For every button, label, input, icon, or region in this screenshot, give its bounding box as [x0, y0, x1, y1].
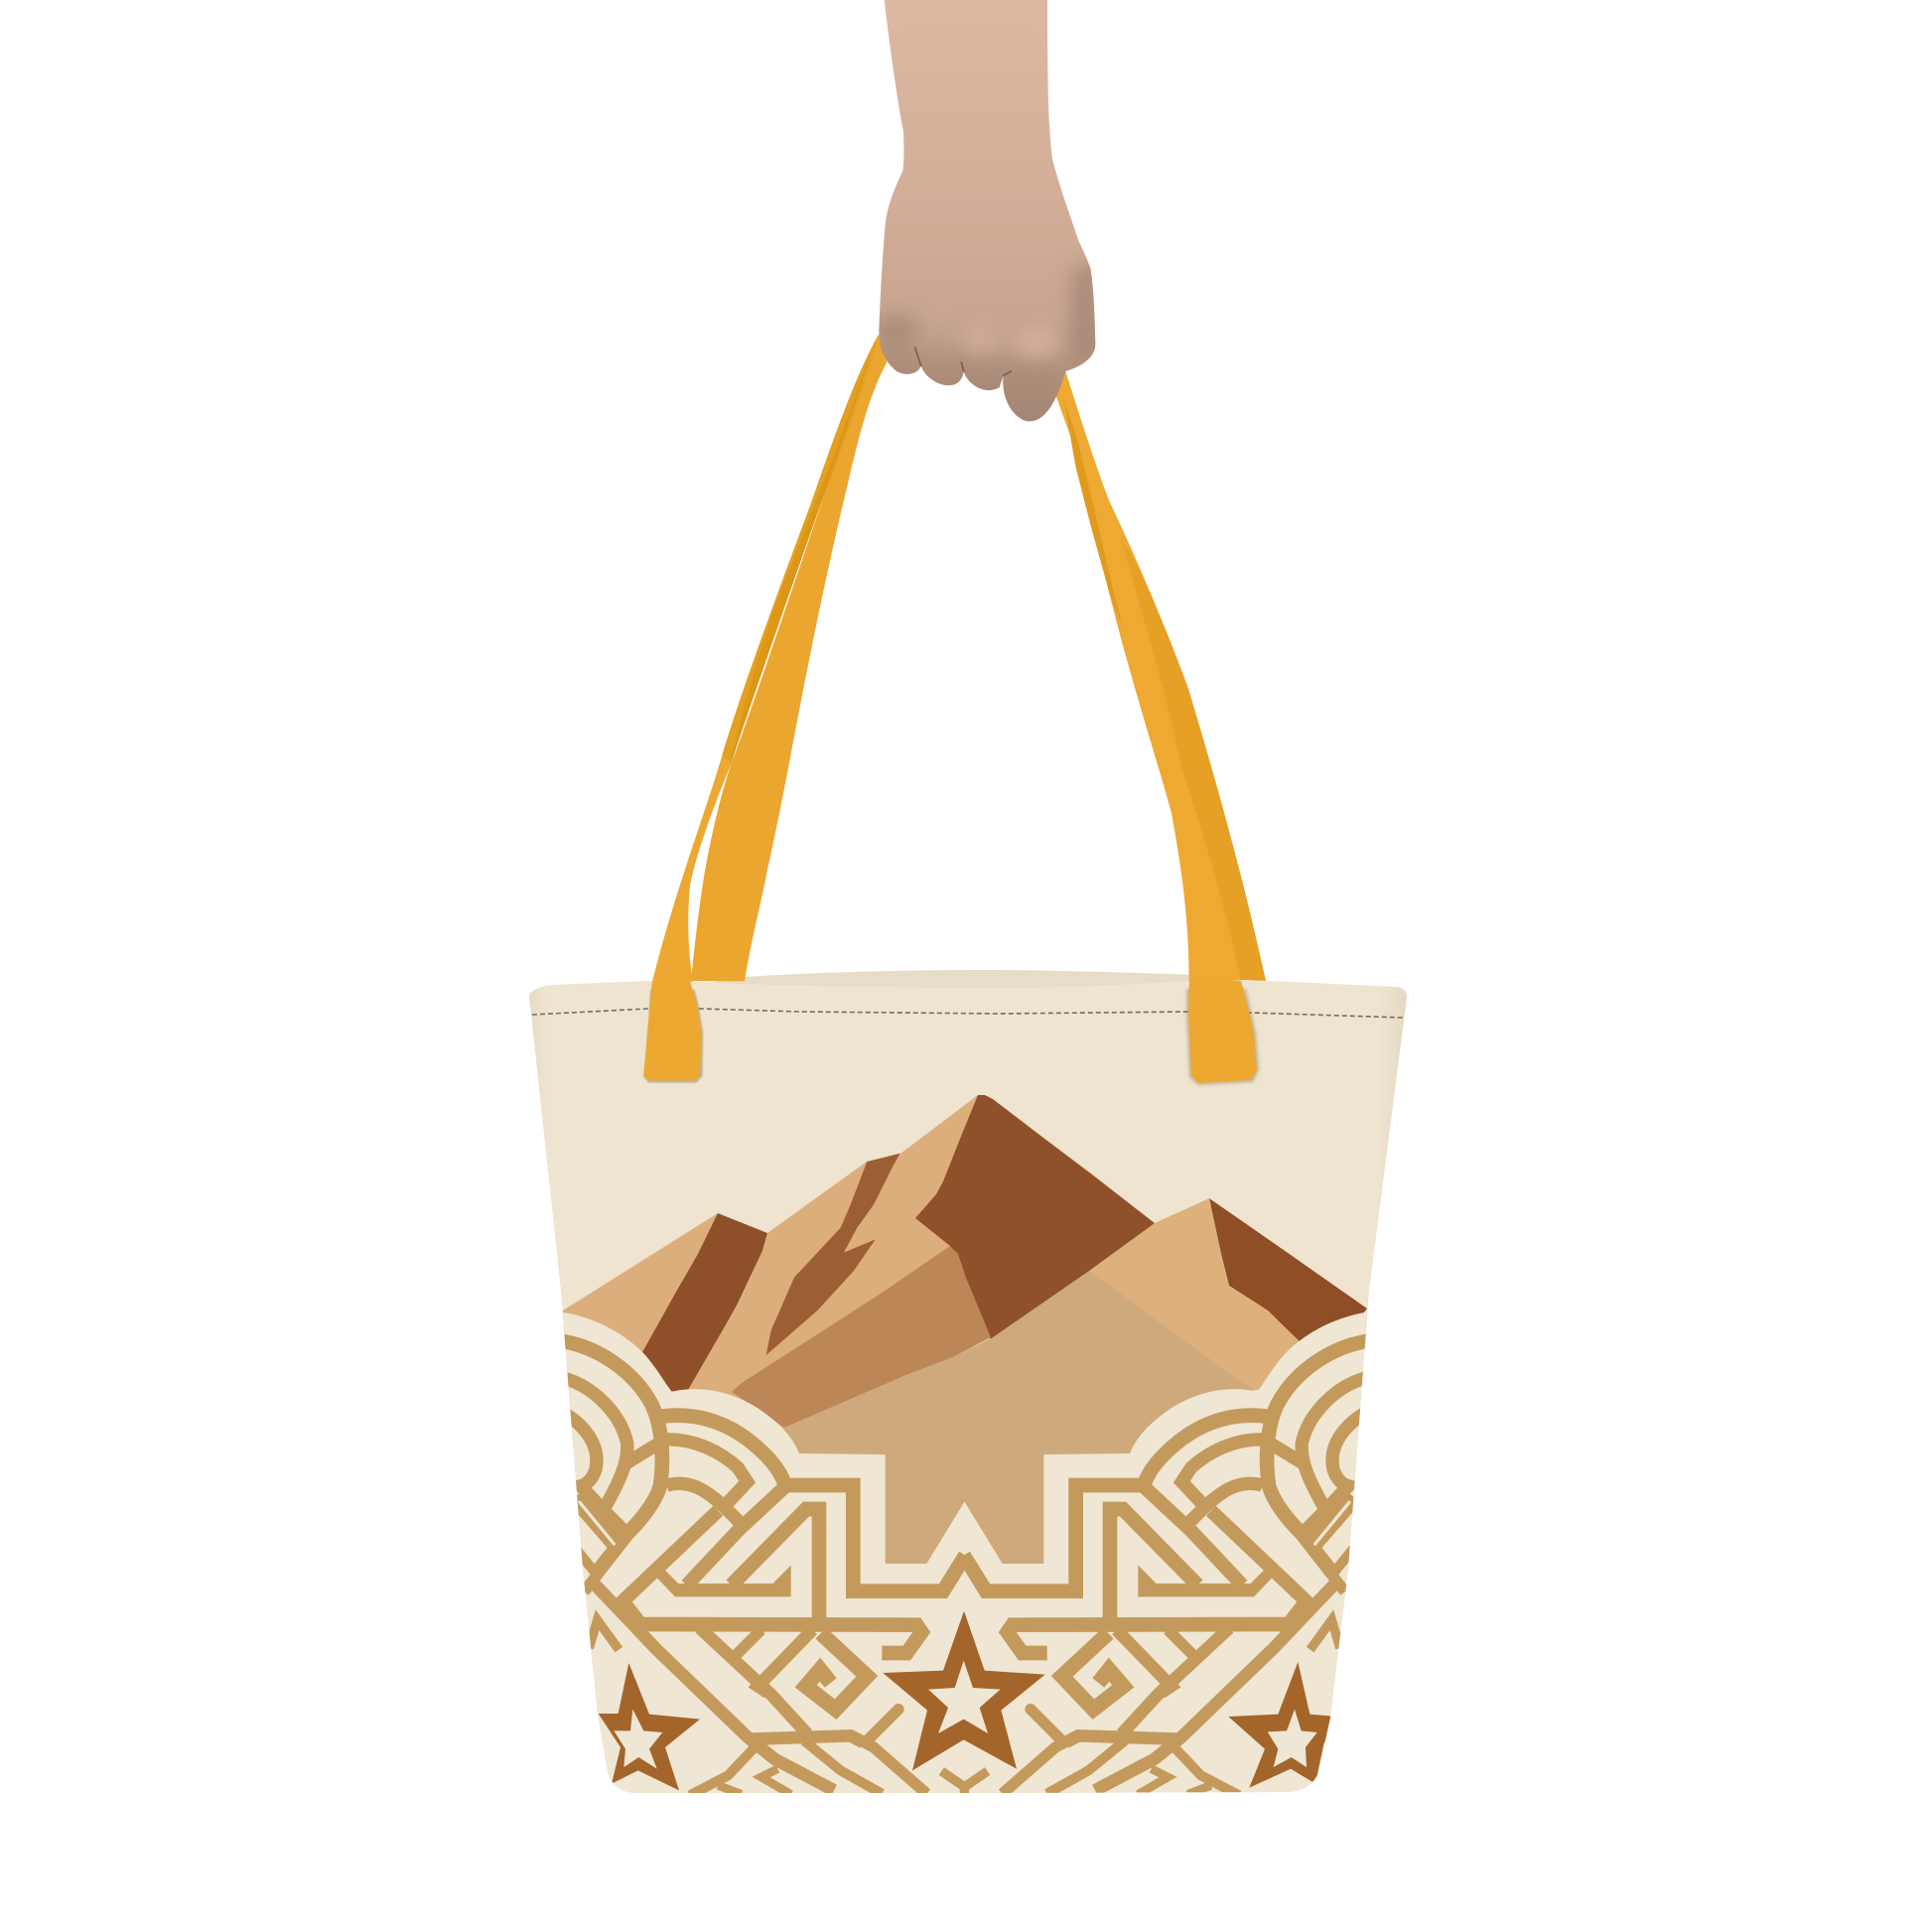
strap shape — [1055, 370, 1266, 1013]
triangle edge — [732, 1630, 761, 1660]
inner scallop arc — [663, 1440, 748, 1504]
upper diagonal — [700, 1628, 807, 1734]
third arc line — [564, 1413, 630, 1537]
rim stitching — [532, 1009, 1403, 1018]
darker crease — [732, 351, 872, 761]
right peak dark face — [1209, 1198, 1367, 1346]
central peak mid face — [732, 1246, 991, 1428]
knuckle highlight — [1013, 325, 1059, 357]
tab shape — [643, 953, 702, 1080]
second arc line — [561, 1377, 657, 1509]
fabric panel — [529, 980, 1407, 1793]
right star — [1228, 1662, 1337, 1788]
connector stroke — [576, 1549, 598, 1576]
bottom line two — [804, 1740, 882, 1794]
tote bag body — [529, 980, 1407, 1793]
foreground sand peak — [784, 1271, 1255, 1564]
right strap tab — [1186, 977, 1259, 1085]
horizontal with hook — [625, 1605, 921, 1653]
left peak light face — [556, 1213, 718, 1449]
tab shadow — [643, 990, 703, 1083]
left star — [599, 1663, 700, 1790]
tab shadow — [1186, 989, 1259, 1085]
hand shading — [872, 258, 1102, 430]
right star inner — [1268, 1710, 1317, 1767]
inner crease — [1064, 399, 1124, 629]
left star outer — [599, 1663, 700, 1790]
central peak shadow streak — [766, 1154, 900, 1355]
left star inner — [614, 1710, 662, 1769]
centre star inner — [928, 1661, 1001, 1733]
upper shaded fold — [722, 335, 879, 763]
right strap — [1055, 370, 1266, 1013]
bottom lines — [852, 1735, 926, 1794]
left knuckle shadow — [872, 313, 918, 349]
left front strap — [648, 335, 879, 1013]
long diagonal — [593, 1582, 834, 1790]
left back strap — [691, 335, 887, 981]
cross stroke — [584, 1571, 601, 1591]
left strap tab — [643, 953, 703, 1083]
key line to centre chevron — [657, 1416, 965, 1591]
bottom centre fork — [941, 1771, 965, 1797]
centre star — [883, 1611, 1045, 1770]
short branch — [866, 1710, 898, 1742]
lower horizontal — [752, 1735, 863, 1742]
finger divisions — [915, 347, 1011, 375]
thumb side shadow — [1069, 258, 1102, 374]
lower finger shadow — [874, 350, 1065, 430]
central peak light face — [689, 1095, 978, 1430]
hand and forearm — [872, 0, 1102, 430]
left half of woven pattern — [556, 1311, 965, 1820]
centre star outer — [883, 1611, 1045, 1770]
diagonal d1 — [621, 1511, 718, 1603]
hand shape — [879, 0, 1095, 421]
diagonal a — [687, 1486, 786, 1586]
right star outer — [1228, 1662, 1337, 1788]
right half of woven pattern — [964, 1311, 1373, 1820]
left peak dark face — [642, 1213, 767, 1395]
right peak light face — [1089, 1198, 1303, 1390]
rhombus edge — [758, 1630, 812, 1693]
slit band — [576, 1496, 619, 1546]
small bottom chevron — [761, 1769, 791, 1794]
fabric edge shading — [526, 973, 1412, 1797]
tab shape — [1188, 977, 1257, 1083]
mountains — [556, 1095, 1367, 1588]
outer fold — [1122, 541, 1266, 981]
bag back panel — [695, 970, 1241, 993]
small bottom stroke — [718, 1785, 742, 1794]
outer arc line — [556, 1340, 662, 1572]
cream scalloped band — [556, 1311, 965, 1820]
innermost scallop arc — [667, 1483, 743, 1526]
front strap shape — [648, 335, 879, 1013]
vertical with diagonal b — [732, 1509, 819, 1625]
bottom left curve — [690, 1744, 758, 1795]
left edge chevron — [589, 1620, 619, 1650]
knuckle highlight two — [963, 321, 1000, 354]
spiral — [806, 1633, 867, 1710]
central peak dark face — [915, 1095, 1155, 1340]
slit opening — [580, 1502, 614, 1544]
spike — [655, 1566, 791, 1596]
